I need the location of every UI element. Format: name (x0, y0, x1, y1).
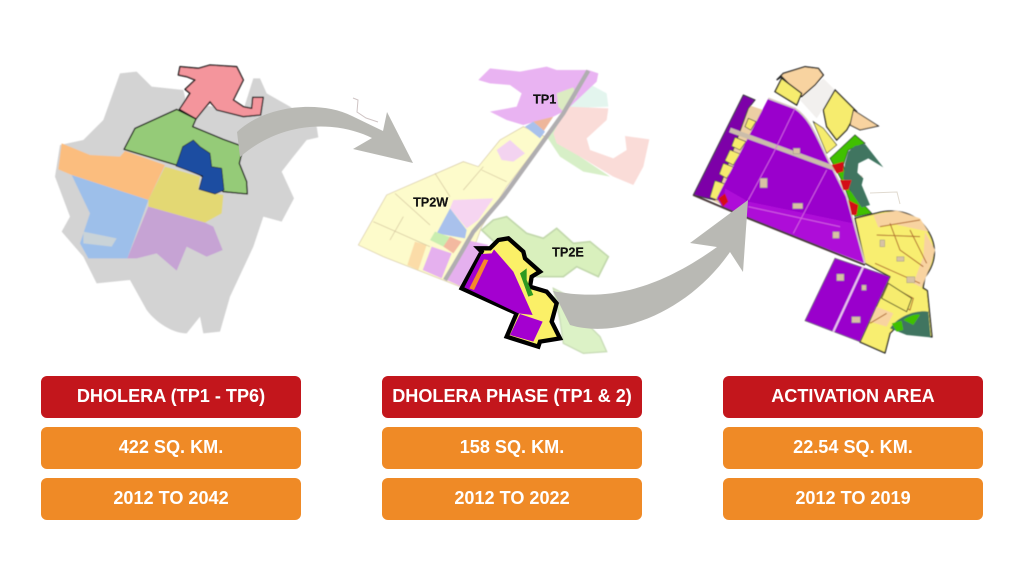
zone: block divider (833, 267, 863, 332)
road lines (373, 167, 507, 247)
zone: lighter purple lower (723, 188, 865, 263)
zone: strip backing (712, 105, 763, 207)
column 1 area: 422 SQ. KM. (119, 437, 223, 457)
region: purple (127, 207, 223, 271)
activation area highlight (462, 238, 560, 347)
zone: south yellow block (882, 283, 912, 312)
region: pink TP1 (178, 65, 263, 119)
zone: south park (890, 311, 931, 337)
column 1 heading: DHOLERA (TP1 - TP6) (77, 386, 265, 406)
column 2 area (382, 427, 642, 469)
arrow: phase to activation area (553, 200, 748, 329)
zone: main outlines (768, 98, 865, 263)
zone: tan wedge (850, 110, 878, 130)
zone: red plots (718, 162, 928, 327)
label TP2E: TP2E (552, 246, 584, 260)
column 2 heading: DHOLERA PHASE (TP1 & 2) (392, 386, 632, 406)
zone: TP2W green (430, 232, 453, 247)
zone: lower green (553, 288, 607, 353)
zone: tan plots (870, 211, 935, 327)
map fills (358, 67, 649, 353)
zone: TP1 (478, 67, 598, 125)
column 3 heading: ACTIVATION AREA (771, 386, 935, 406)
region: orange (58, 143, 165, 200)
column 2 heading (382, 376, 642, 418)
zone: pale pink upper (497, 140, 525, 162)
column 3 heading (723, 376, 983, 418)
column 3 period: 2012 TO 2019 (795, 488, 911, 508)
zone: tan top (777, 67, 823, 97)
zone: dark green (843, 144, 883, 207)
zone: yellow along curve (813, 122, 837, 153)
zone: south park green (892, 314, 920, 332)
map: activation area (693, 67, 935, 353)
region: grey outline (55, 72, 318, 333)
zone: south edge (693, 195, 865, 265)
column 1 period (41, 478, 301, 520)
region: lake (83, 232, 117, 247)
column 3 area: 22.54 SQ. KM. (793, 437, 913, 457)
zone: bottom purple block (805, 258, 890, 342)
zone: inner road lines (870, 220, 927, 323)
zone: TP1 green patch (557, 87, 577, 112)
zone: white (800, 78, 835, 118)
region: activation area blue (176, 140, 224, 194)
zone: TP2W blue (437, 208, 467, 238)
column 1 area (41, 427, 301, 469)
zone: cross road (730, 130, 862, 178)
zone: TP2W purple (423, 247, 452, 278)
zone: road side purple (447, 240, 488, 286)
column 3 period (723, 478, 983, 520)
zone: right yellow district (855, 211, 934, 353)
arrow: Dholera to phase (237, 107, 413, 163)
activation orange strip (469, 259, 488, 290)
zone: pale green by TP1 (547, 110, 610, 177)
map: Dholera TP1-TP6 (55, 65, 318, 333)
zone: salmon (533, 117, 553, 132)
region: yellow (148, 167, 223, 223)
region: light blue (72, 175, 148, 258)
zone: pale cyan (560, 83, 608, 108)
column 1 period: 2012 TO 2042 (113, 488, 229, 508)
zone: TP2E green (482, 217, 608, 277)
activation green strip (520, 268, 533, 297)
zone: yellow top (775, 78, 802, 105)
zone: pale pink TP1 side (553, 107, 649, 185)
column 3 area (723, 427, 983, 469)
zone: blue small (525, 122, 545, 138)
column 2 period (382, 478, 642, 520)
column 1 heading (41, 376, 301, 418)
zone: main purple (717, 98, 865, 263)
zone: left strip (693, 95, 755, 200)
zone: TP2W (358, 127, 545, 287)
label TP1: TP1 (533, 93, 556, 107)
activation purple lower (510, 314, 543, 342)
map: thin pale road lines (870, 192, 900, 204)
road (445, 71, 588, 280)
column 2 period: 2012 TO 2022 (454, 488, 570, 508)
zone: strip yellow plots (710, 118, 756, 200)
zone: small building plots (760, 148, 915, 323)
region: green TP2 (124, 109, 247, 194)
map: Dholera phase (358, 67, 649, 353)
zone: yellow upper right (823, 90, 857, 140)
zone: internal roads (748, 108, 840, 233)
zone: bright green (830, 135, 872, 217)
map: thin boundary line (353, 98, 378, 122)
zone: TP2W pink (450, 198, 493, 228)
activation purple main (464, 249, 533, 315)
column 2 area: 158 SQ. KM. (460, 437, 564, 457)
zone: TP2W orange (407, 242, 427, 270)
label TP2W: TP2W (413, 196, 448, 210)
zone: TP2W salmon (443, 237, 462, 253)
